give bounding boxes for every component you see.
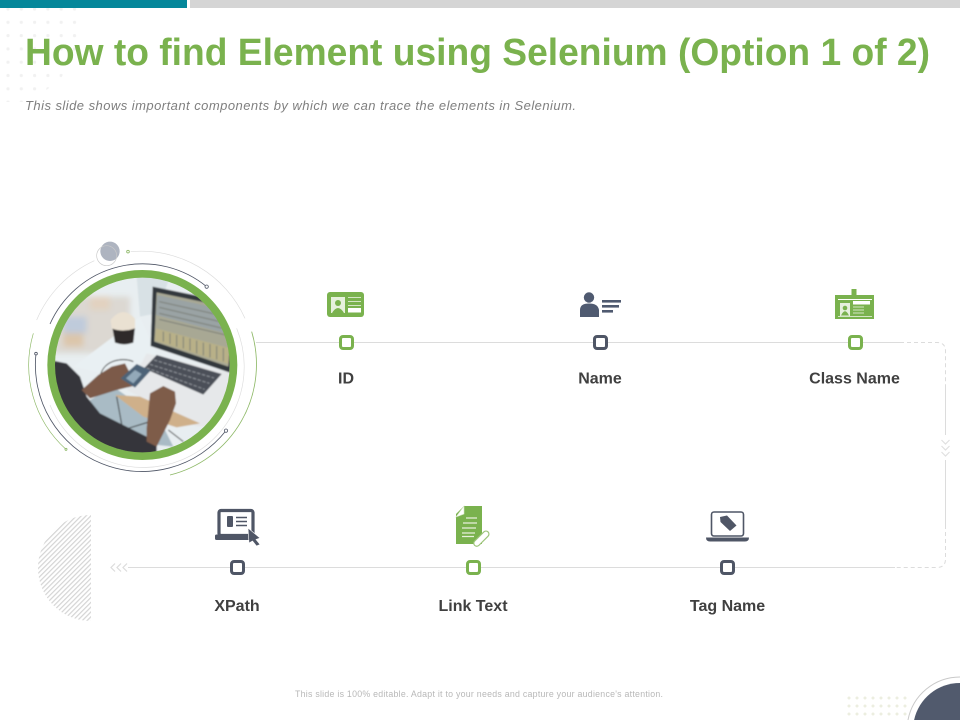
node — [468, 562, 480, 574]
icon: document with paperclip — [456, 506, 490, 547]
label: Link Text — [438, 598, 508, 615]
label: ID — [338, 370, 354, 388]
decorative circle bottom right — [908, 677, 960, 720]
node — [850, 336, 862, 348]
orbit arcs — [29, 251, 256, 475]
item: Class Name — [809, 289, 900, 388]
subtitle: This slide shows important components by which we can trace the elements in Selenium. — [25, 98, 576, 113]
hatched half circle — [38, 515, 91, 621]
green ring — [51, 274, 233, 456]
item: Tag Name — [690, 512, 765, 615]
icon: laptop with tag — [706, 512, 749, 542]
top bar — [0, 0, 960, 8]
connector path — [128, 342, 946, 568]
chevrons right — [942, 440, 950, 456]
node — [594, 336, 606, 348]
node — [232, 562, 244, 574]
orbit node dots — [35, 250, 228, 450]
node — [722, 562, 734, 574]
decorative dots bottom right — [845, 694, 907, 720]
photo circle group — [29, 242, 256, 475]
icon: person with lines — [580, 292, 621, 317]
item: ID — [327, 292, 364, 388]
icon: laptop with cursor — [215, 510, 260, 546]
footer note: This slide is 100% editable. Adapt it to your needs and capture your audience's attention. — [295, 689, 663, 699]
label: Name — [578, 370, 622, 388]
item: Link Text — [438, 506, 508, 615]
photo of laptop user — [55, 278, 230, 452]
item: Name — [578, 292, 622, 388]
small grey circle — [97, 242, 120, 266]
label: XPath — [214, 598, 260, 615]
label: Class Name — [809, 370, 900, 388]
decorative dot grid top left — [0, 8, 82, 102]
node — [340, 336, 352, 348]
icon: badge — [835, 289, 874, 319]
item: XPath — [214, 510, 260, 615]
chevrons left — [111, 564, 127, 572]
icon: ID card — [327, 292, 364, 317]
title: How to find Element using Selenium (Option 1 of 2) — [25, 32, 930, 74]
label: Tag Name — [690, 598, 765, 615]
